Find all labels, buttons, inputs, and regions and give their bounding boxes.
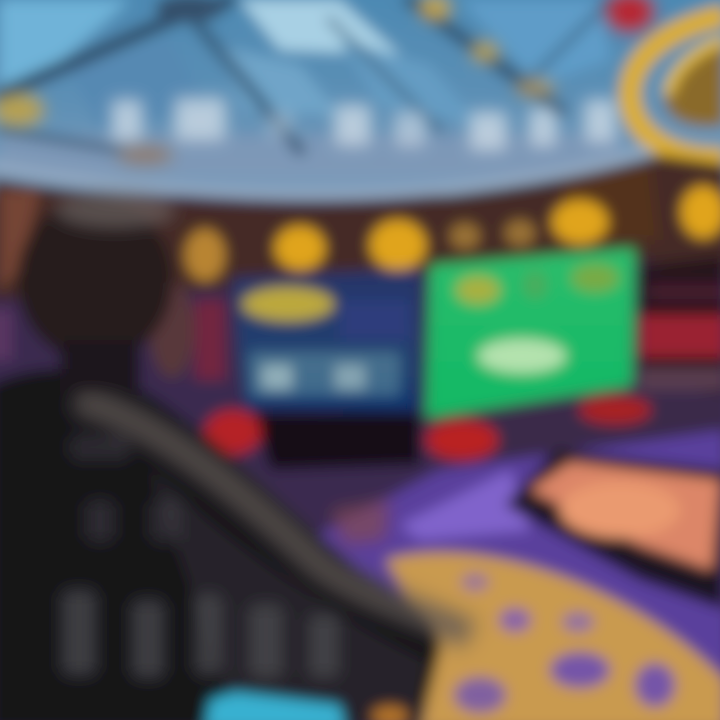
blue screen — [232, 268, 420, 412]
person: body — [0, 369, 470, 720]
ceiling rim light — [0, 150, 650, 195]
blurred overlay text on body — [62, 435, 338, 678]
person: shoulder highlight — [75, 400, 470, 635]
ceiling accent lights — [0, 0, 654, 165]
right side red and black displays — [640, 255, 720, 395]
row of yellow lights — [185, 186, 720, 281]
person: head — [17, 192, 194, 390]
ceiling blurred sign text — [112, 98, 615, 150]
left edge purple glow — [0, 300, 225, 380]
floor — [270, 430, 720, 720]
cyan glow at bottom — [205, 692, 408, 720]
console under screens — [205, 395, 720, 470]
ceiling dark beams — [0, 0, 610, 150]
gaming table at right — [505, 450, 720, 610]
yellow ring sign — [630, 15, 720, 158]
dark wooden band — [0, 155, 720, 300]
green screen — [426, 248, 635, 418]
panel: glass ceiling — [0, 0, 720, 195]
roulette style table — [385, 552, 720, 720]
